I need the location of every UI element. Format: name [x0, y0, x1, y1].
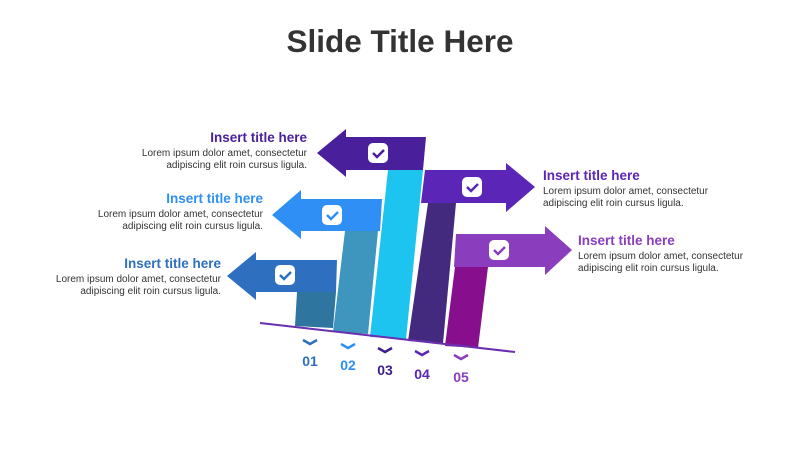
text block right 5: Insert title here	[578, 233, 675, 248]
text block left bottom: Insert title here	[124, 256, 221, 271]
text block left top: Insert title here	[210, 130, 307, 145]
labels 01-05	[302, 340, 469, 385]
text block right 4: Insert title here	[543, 168, 640, 183]
title: Slide Title Here	[286, 23, 514, 59]
text block left bottom: Lorem ipsum dolor amet, consectetur	[56, 274, 222, 285]
text block left middle: adipiscing elit roin cursus ligula.	[122, 221, 263, 232]
text block right 5: Lorem ipsum dolor amet, consectetur	[578, 251, 744, 262]
labels 01-05: 01	[302, 353, 318, 369]
text block left bottom: adipiscing elit roin cursus ligula.	[80, 286, 221, 297]
text block right 4	[543, 168, 709, 209]
text block right 4: Lorem ipsum dolor amet, consectetur	[543, 186, 709, 197]
arrow 3 left top	[317, 129, 426, 177]
labels 01-05: 03	[377, 362, 393, 378]
arrow 1 left	[227, 252, 337, 300]
text block left middle: Lorem ipsum dolor amet, consectetur	[98, 209, 264, 220]
text block left top: adipiscing elit roin cursus ligula.	[166, 160, 307, 171]
text block right 5	[578, 233, 744, 274]
text block left middle	[98, 191, 264, 232]
labels 01-05: 05	[453, 369, 469, 385]
arrow 4 right	[421, 163, 535, 212]
text block left bottom	[56, 256, 222, 297]
labels 01-05: 02	[340, 357, 356, 373]
text block left middle: Insert title here	[166, 191, 263, 206]
bars	[295, 170, 488, 348]
arrow 2 left	[272, 190, 382, 239]
baseline	[260, 323, 515, 352]
labels 01-05: 04	[414, 366, 430, 382]
text block right 4: adipiscing elit roin cursus ligula.	[543, 198, 684, 209]
text block left top: Lorem ipsum dolor amet, consectetur	[142, 148, 308, 159]
text block left top	[142, 130, 308, 171]
arrow 5 right	[454, 226, 572, 275]
text block right 5: adipiscing elit roin cursus ligula.	[578, 263, 719, 274]
